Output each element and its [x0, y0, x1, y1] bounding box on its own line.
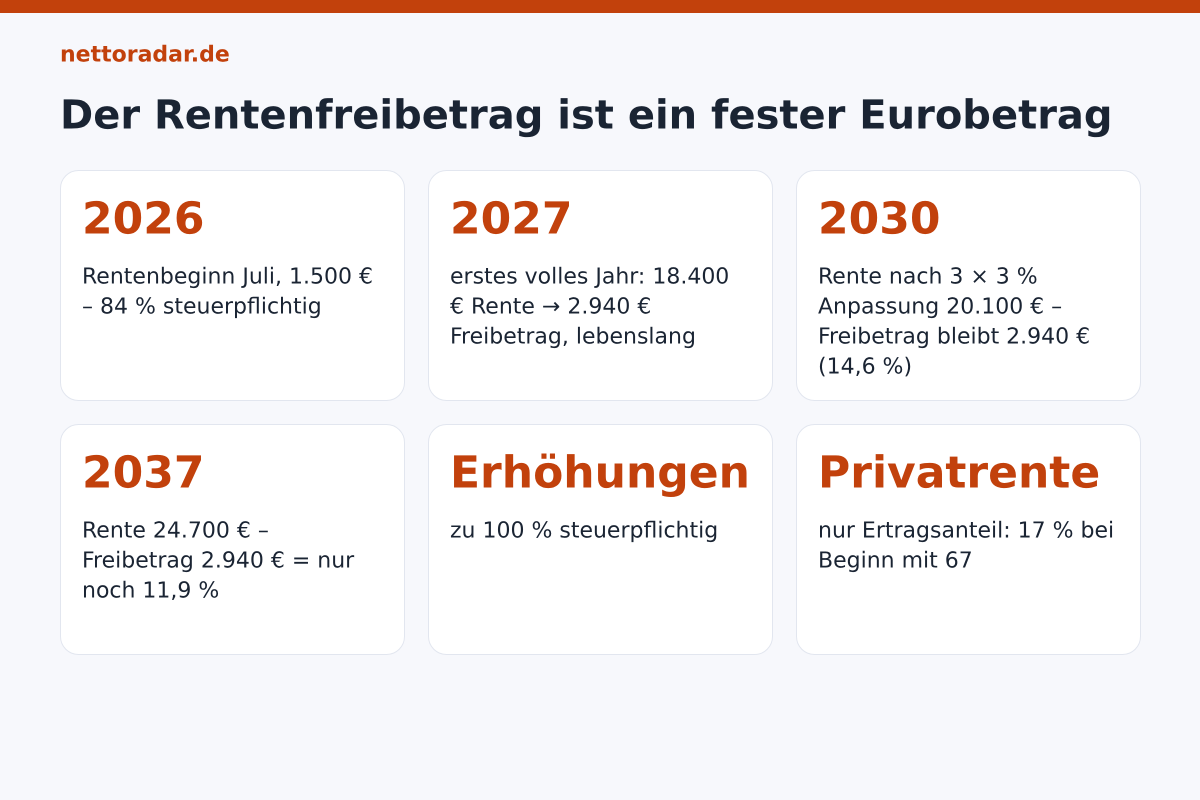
text: 2037: noch 11,9 %: [82, 578, 219, 604]
text: Privatrente: nur Ertragsanteil: 17 % bei: [818, 518, 1114, 544]
panel: 2030: [796, 170, 1140, 400]
heading: 2030: 2030: [818, 194, 940, 244]
heading: 2026: 2026: [82, 194, 204, 244]
text: 2027: [450, 264, 729, 350]
heading: Erhöhungen: Erhöhungen: [450, 448, 750, 498]
panel: 2027: [428, 170, 772, 400]
text: 2027: € Rente → 2.940 €: [450, 294, 651, 320]
heading: Privatrente: Privatrente: [818, 448, 1100, 498]
text: 2026: [82, 264, 373, 320]
text: Privatrente: [818, 518, 1114, 574]
panel: 2037: [60, 424, 404, 654]
text: 2027: Freibetrag, lebenslang: [450, 324, 696, 350]
text: 2037: Freibetrag 2.940 € = nur: [82, 548, 355, 574]
text: 2030: Rente nach 3 × 3 %: [818, 264, 1038, 290]
text: 2030: Freibetrag bleibt 2.940 €: [818, 324, 1090, 350]
text: 2026: – 84 % steuerpflichtig: [82, 294, 322, 320]
title: Der Rentenfreibetrag ist ein fester Eurobetrag: [60, 92, 1113, 138]
brand name: nettoradar.de: [60, 42, 230, 68]
text: 2030: (14,6 %): [818, 354, 912, 380]
heading: 2027: 2027: [450, 194, 572, 244]
text: 2026: Rentenbeginn Juli, 1.500 €: [82, 264, 373, 290]
text: Erhöhungen: zu 100 % steuerpflichtig: [450, 518, 718, 544]
heading: 2037: 2037: [82, 448, 204, 498]
text: 2037: [82, 518, 355, 604]
panel: Erhöhungen: [428, 424, 772, 654]
panel: 2026: [60, 170, 404, 400]
text: 2030: Anpassung 20.100 € –: [818, 294, 1062, 320]
text: 2037: Rente 24.700 € –: [82, 518, 269, 544]
text: 2027: erstes volles Jahr: 18.400: [450, 264, 729, 290]
panel: Privatrente: [796, 424, 1140, 654]
top accent bar: [0, 0, 1200, 13]
text: 2030: [818, 264, 1090, 380]
text: Privatrente: Beginn mit 67: [818, 548, 973, 574]
